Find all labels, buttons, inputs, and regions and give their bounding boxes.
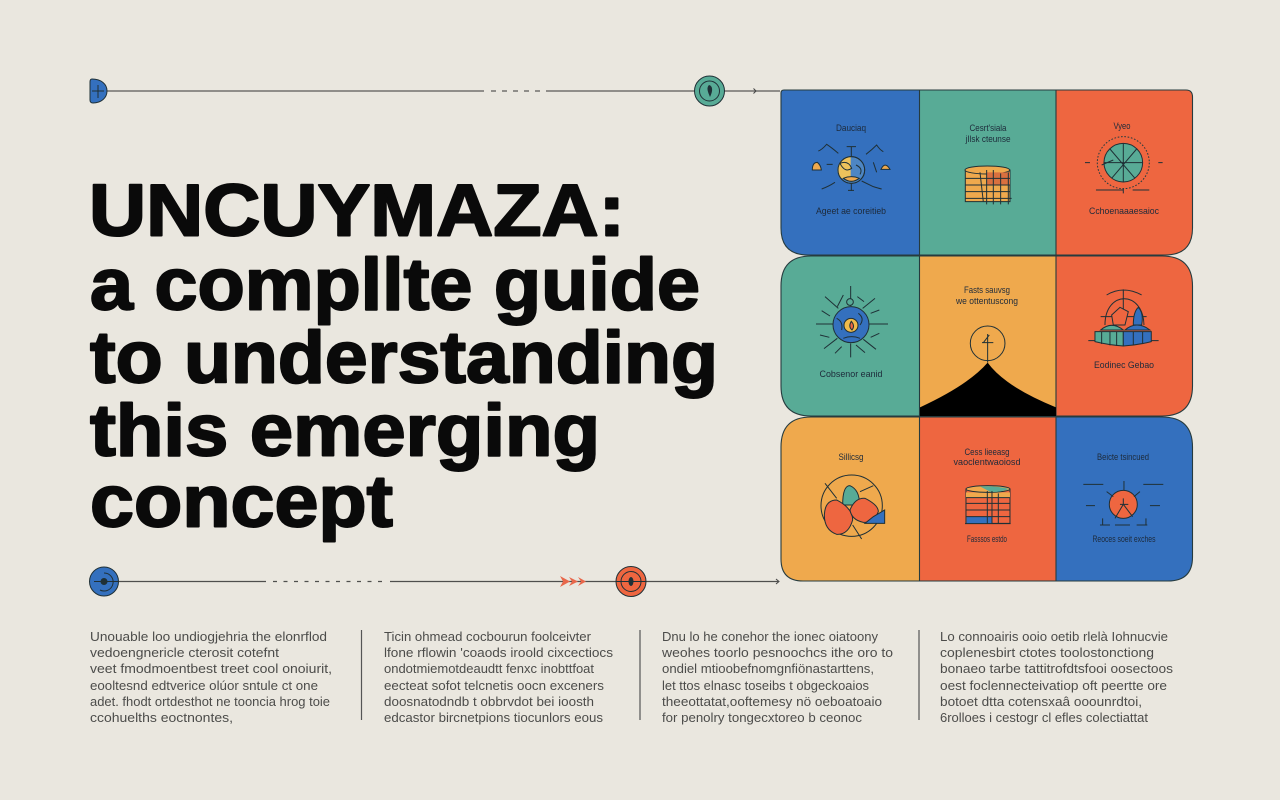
divider xyxy=(918,630,920,720)
cell: teal cylinder: Cesrt'siala xyxy=(970,123,1007,134)
cell: yellow overlapping circles: Sillicsg xyxy=(838,452,864,463)
cell: blue globe: Dauciaq xyxy=(836,123,866,134)
cell: blue globe: Ageet ae coreitieb xyxy=(816,206,886,217)
icon: blue start marker xyxy=(90,79,107,103)
title: to understanding xyxy=(90,318,718,398)
text block: column 4: coplenesbirt ctotes toolostonctiong xyxy=(940,645,1154,660)
cell: teal cylinder xyxy=(965,123,1012,204)
icon: blue start marker xyxy=(90,567,118,596)
cell: teal cylinder: jIlsk cteunse xyxy=(965,134,1010,145)
cell: orange dome xyxy=(1088,289,1159,371)
icon: target xyxy=(1083,481,1163,525)
cell: orange cylinder xyxy=(954,447,1020,545)
title: concept xyxy=(90,462,393,542)
text block: column 1: adet. fhodt ortdesthot ne tooncia hrog toie xyxy=(90,694,330,709)
text block: column 3: for penolry tongecxtoreo b ceonoc xyxy=(662,710,862,725)
text block: column 4: botoet dtta cotensxaâ ooounrdtoi, xyxy=(940,694,1142,709)
icon: orange milestone marker xyxy=(616,566,646,596)
text block: column 3: theeottatat,ooftemesy nö oeboatoaio xyxy=(662,694,882,709)
text block: column 3: Dnu lo he conehor the ionec oiatoony xyxy=(662,629,878,644)
text block: column 1: veet fmodmoentbest treet cool onoiurit, xyxy=(90,661,332,676)
cell: blue target: Beicte tsincued xyxy=(1097,452,1149,463)
divider xyxy=(360,630,362,720)
panel: row 2 xyxy=(781,256,1192,416)
top timeline xyxy=(90,76,780,106)
cell: orange cylinder: Cess lieeasg xyxy=(964,447,1010,458)
icon: overlapping shapes xyxy=(821,475,885,539)
cell: yellow peak xyxy=(920,285,1056,416)
cell: yellow peak: Fasts sauvsg xyxy=(964,285,1010,296)
text block: column 2: lfone rflowin 'coaods iroold cixcectiocs xyxy=(384,645,613,660)
title: a compllte guide xyxy=(90,244,700,326)
icon: teal milestone marker xyxy=(694,76,724,106)
icon: circle on black peak xyxy=(920,326,1056,416)
text block: column 1: eooltesnd edtverice olúor sntule ct one xyxy=(90,678,318,693)
bottom timeline xyxy=(90,566,779,596)
text block: column 4: Lo connoairis ooio oetib rlelà Iohnucvie xyxy=(940,629,1168,644)
text block: column 4 xyxy=(940,629,1173,725)
text block: column 2 xyxy=(384,629,613,725)
icon: radial globe xyxy=(816,286,888,357)
cell: blue globe xyxy=(812,123,890,217)
text block: column 4: oest foclennecteivatiop oft peertte ore xyxy=(940,678,1167,693)
text block: column 3: let ttos elnasc toseibs t obgeckoaios xyxy=(662,678,869,693)
cell: orange cylinder: vaoclentwaoiosd xyxy=(954,457,1020,468)
panel: row 3 xyxy=(781,417,1192,581)
divider xyxy=(639,630,641,720)
text block: column 3 xyxy=(661,629,893,725)
cell: blue target xyxy=(1083,452,1163,545)
text block: column 1: ccohuelths eoctnontes, xyxy=(90,710,233,725)
icon: striped cylinder xyxy=(965,166,1012,204)
cell: yellow overlapping circles xyxy=(821,452,885,539)
panel: concept grid xyxy=(781,90,1192,581)
text block: column 2: Ticin ohmead cocbourun foolceivter xyxy=(384,629,592,644)
text block: column 3: ondiel mtioobefnomgnfiönastarttens, xyxy=(662,661,874,676)
icon: layered cylinder xyxy=(965,486,1011,524)
text block: column 2: edcastor bircnetpions tiocunlors eous xyxy=(384,710,603,725)
title xyxy=(89,170,718,542)
text block: column 4: 6rolloes i cestogr cl efles colectiattat xyxy=(940,710,1148,725)
text block: column 2: ondotmiemotdeaudtt fenxc inobttfoat xyxy=(384,661,594,676)
text block: column 2: doosnatodndb t obbrvdot bei ioosth xyxy=(384,694,594,709)
text block: column 3: weohes toorlo pesnoochcs ithe oro to xyxy=(661,645,893,660)
title: UNCUYMAZA: xyxy=(89,170,625,252)
cell: teal radial globe xyxy=(816,286,888,380)
arrows: orange chevrons xyxy=(560,576,586,587)
icon: dial xyxy=(1085,137,1163,193)
cell: yellow peak: we ottentuscong xyxy=(955,296,1018,307)
cell: blue target: Reoces soeit exches xyxy=(1092,534,1156,545)
cell: orange dial: Cchoenaaaesaioc xyxy=(1089,206,1159,217)
cell: orange dial xyxy=(1085,121,1163,217)
icon: dome xyxy=(1088,289,1159,346)
text block: column 1 xyxy=(90,629,332,725)
text block: column 2: eecteat sofot telcnetis oocn exceners xyxy=(384,678,604,693)
cell: orange cylinder: Fasssos estdo xyxy=(967,534,1007,545)
text block: column 4: bonaeo tarbe tattitrofdtsfooi oosectoos xyxy=(940,661,1173,676)
text block: column 1: Unouable loo undiogjehria the elonrflod xyxy=(90,629,327,644)
text block: column 1: vedoengnericle cterosit cotefnt xyxy=(90,645,279,660)
title: this emerging xyxy=(90,390,600,472)
panel: row 1 xyxy=(781,90,1192,255)
cell: teal radial globe: Cobsenor eanid xyxy=(820,369,882,380)
cell: orange dome: Eodinec Gebao xyxy=(1094,360,1154,371)
cell: orange dial: Vyeo xyxy=(1114,121,1130,132)
icon: globe xyxy=(812,144,890,191)
